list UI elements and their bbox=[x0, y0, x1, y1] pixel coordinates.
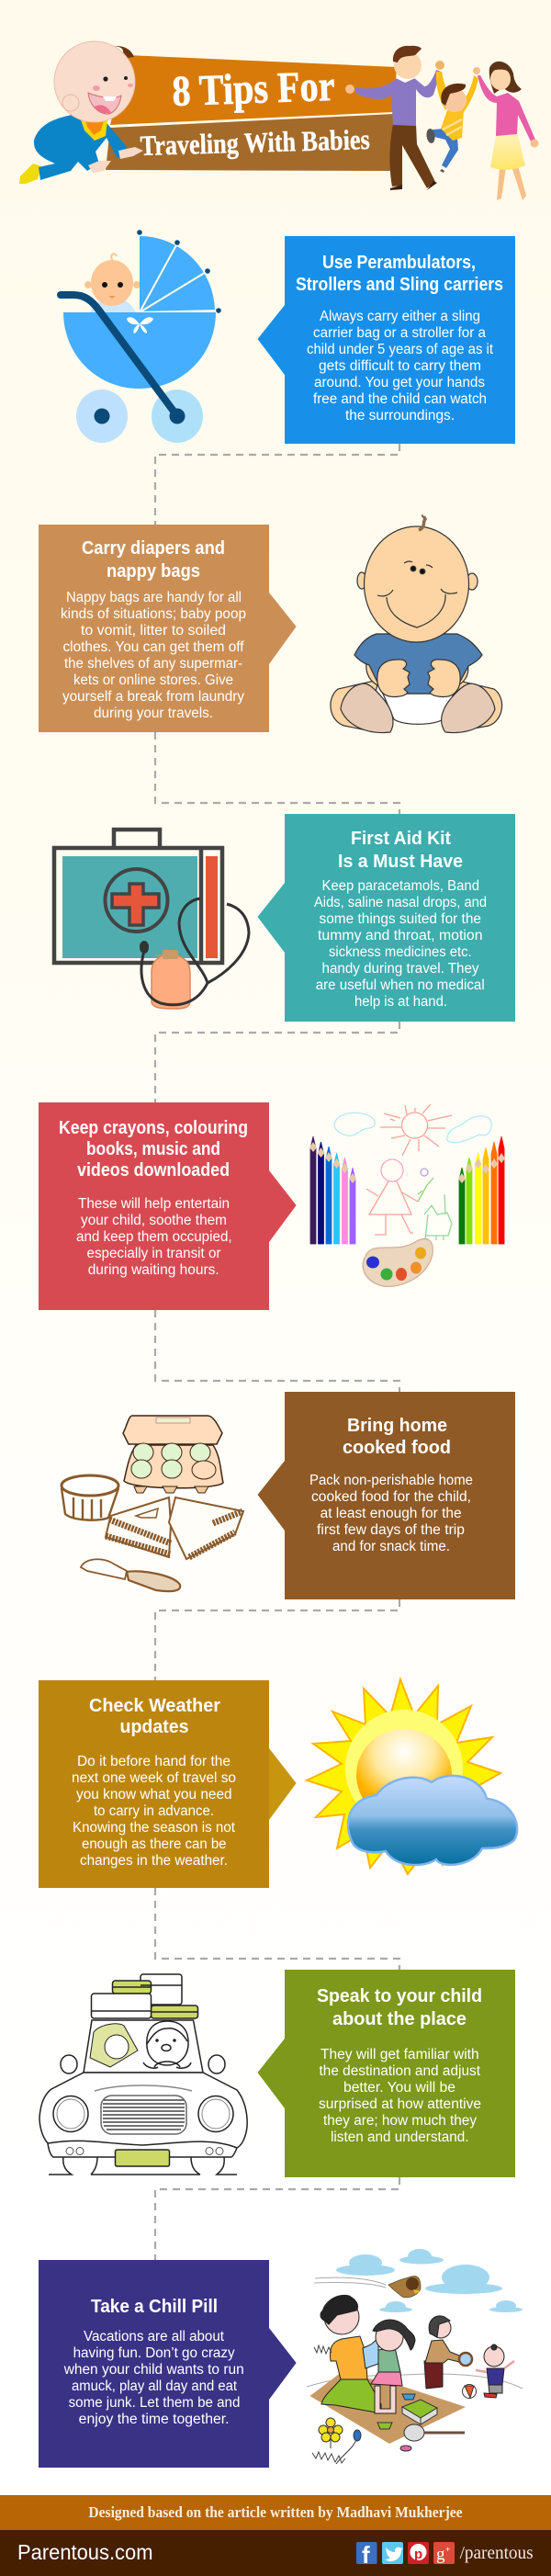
body text: some junk. Let them be and bbox=[69, 2395, 240, 2411]
windscreen bbox=[84, 2020, 203, 2073]
body text: free and the child can watch bbox=[313, 391, 487, 407]
body text: They will get familiar with bbox=[320, 2047, 479, 2062]
body text: yourself a break from laundry bbox=[62, 689, 244, 705]
heading: Strollers and Sling carriers bbox=[296, 275, 503, 295]
body text: the surroundings. bbox=[345, 408, 455, 424]
icon: facebook: f bbox=[362, 2541, 370, 2569]
body text: your child, soothe them bbox=[81, 1213, 227, 1228]
headlights bbox=[53, 2096, 88, 2131]
body text bbox=[319, 2047, 481, 2145]
heading: Check Weather bbox=[89, 1696, 220, 1716]
egg carton bbox=[123, 1416, 223, 1493]
footer credit band bbox=[0, 2495, 551, 2530]
boy bbox=[425, 67, 480, 173]
panel: card 1 bbox=[257, 236, 515, 444]
bird bbox=[388, 2277, 421, 2298]
credit text: Designed based on the article written by Madhavi Mukherjee bbox=[88, 2503, 463, 2521]
heading bbox=[82, 538, 225, 582]
body text: during waiting hours. bbox=[88, 1262, 219, 1278]
icon: eggs, sandwich, bowl and knife bbox=[62, 1416, 243, 1591]
tip 1: perambulators bbox=[61, 230, 515, 444]
heading bbox=[338, 829, 463, 872]
body text: kinds of situations; baby poop bbox=[61, 606, 246, 622]
icon: family picnic bbox=[307, 2249, 523, 2464]
child drawing bbox=[366, 1159, 418, 1235]
pencils bbox=[309, 1136, 505, 1244]
body text: at least enough for the bbox=[320, 1506, 462, 1521]
icon: car with luggage and driver bbox=[39, 1974, 247, 2175]
body text: especially in transit or bbox=[86, 1246, 220, 1261]
heading: Is a Must Have bbox=[338, 852, 463, 872]
panel: card 8 bbox=[39, 2260, 297, 2468]
crayon sun and clouds bbox=[334, 1104, 491, 1240]
grille bbox=[101, 2096, 186, 2134]
icon: facebook bbox=[356, 2541, 377, 2569]
heading: about the place bbox=[332, 2009, 467, 2029]
ground line bbox=[307, 2277, 523, 2389]
body text: Nappy bags are handy for all bbox=[66, 590, 242, 605]
body text: listen and understand. bbox=[331, 2130, 468, 2145]
body text: the shelves of any supermar- bbox=[64, 656, 242, 672]
woman reading bbox=[320, 2295, 381, 2413]
body text: handy during travel. They bbox=[321, 961, 479, 977]
ramekin bowl bbox=[62, 1475, 118, 1520]
heading: Use Perambulators, bbox=[322, 253, 476, 273]
body text: carrier bag or a stroller for a bbox=[313, 325, 486, 341]
body text: and for snack time. bbox=[332, 1539, 450, 1554]
body text: having fun. Don’t go crazy bbox=[73, 2345, 235, 2361]
body text: and keep them occupied, bbox=[76, 1229, 232, 1245]
body text: tummy and throat, motion bbox=[318, 928, 483, 943]
body text bbox=[76, 1196, 232, 1278]
icon: google plus: g bbox=[436, 2545, 445, 2564]
heading: Keep crayons, colouring bbox=[59, 1118, 248, 1138]
body text: surprised at how attentive bbox=[319, 2096, 481, 2112]
panel: card 7 bbox=[257, 1970, 515, 2177]
heading bbox=[317, 1986, 482, 2029]
heading: books, music and bbox=[86, 1139, 220, 1159]
body text: Keep paracetamols, Band bbox=[321, 878, 479, 894]
heading: Bring home bbox=[347, 1416, 447, 1436]
body text: they are; how much they bbox=[323, 2113, 477, 2129]
tip 8: chill pill bbox=[39, 2249, 523, 2468]
body text: around. You get your hands bbox=[314, 375, 485, 390]
panel: card 5 bbox=[257, 1392, 515, 1599]
heading bbox=[296, 253, 503, 295]
body text bbox=[72, 1754, 236, 1869]
man with frame bbox=[424, 2316, 472, 2389]
icon: first aid case with stethoscope bbox=[54, 830, 249, 1009]
body text bbox=[314, 878, 487, 1010]
body text: Pack non-perishable home bbox=[309, 1473, 473, 1488]
tip 4: crayons bbox=[39, 1102, 505, 1310]
tip 5: home cooked food bbox=[62, 1392, 515, 1599]
body text: you know what you need bbox=[76, 1787, 232, 1802]
icon: google plus: + bbox=[445, 2545, 450, 2554]
heading: updates bbox=[119, 1717, 189, 1737]
heading: nappy bags bbox=[107, 561, 200, 582]
body text: gets difficult to carry them bbox=[319, 358, 481, 374]
tip 3: first aid kit bbox=[54, 814, 515, 1022]
body text: next one week of travel so bbox=[72, 1770, 236, 1786]
body text: amuck, play all day and eat bbox=[72, 2378, 238, 2394]
body text: child under 5 years of age as it bbox=[307, 342, 494, 357]
mirrors bbox=[61, 2055, 77, 2073]
subtitle: Traveling With Babies: Traveling With Babies bbox=[140, 123, 370, 162]
tip 2: diapers bbox=[39, 515, 502, 733]
arrow bbox=[269, 1748, 297, 1820]
heading: cooked food bbox=[343, 1438, 451, 1458]
butter knife bbox=[81, 1559, 180, 1591]
icon: google plus bbox=[433, 2542, 455, 2564]
panel: card 2 bbox=[39, 525, 297, 732]
handle: /parentous bbox=[460, 2543, 534, 2563]
picnic mat bbox=[310, 2372, 466, 2444]
body text: better. You will be bbox=[343, 2080, 455, 2096]
body text: clothes. You can get them off bbox=[62, 639, 244, 655]
wheels bbox=[49, 2157, 237, 2175]
luggage bbox=[92, 1974, 198, 2018]
body text: are useful when no medical bbox=[316, 977, 485, 993]
sandwich triangles bbox=[106, 1497, 243, 1559]
body text: These will help entertain bbox=[78, 1196, 230, 1212]
body text: cooked food for the child, bbox=[311, 1489, 471, 1505]
icon: pinterest: p bbox=[414, 2547, 422, 2562]
icon: pinterest bbox=[408, 2542, 429, 2564]
body text bbox=[309, 1473, 473, 1554]
connector dashed lines bbox=[155, 444, 399, 2260]
body text: Aids, saline nasal drops, and bbox=[314, 895, 487, 910]
number plate bbox=[116, 2150, 169, 2166]
paint palette bbox=[363, 1238, 433, 1286]
panel: card 6 bbox=[39, 1680, 297, 1888]
body text: first few days of the trip bbox=[317, 1522, 465, 1538]
body text: Vacations are all about bbox=[84, 2329, 225, 2344]
body text: enough as there can be bbox=[82, 1836, 226, 1852]
body text: enjoy the time together. bbox=[79, 2412, 230, 2427]
icon: twitter bbox=[382, 2542, 403, 2564]
clouds bbox=[336, 2249, 523, 2312]
body text: changes in the weather. bbox=[80, 1853, 228, 1869]
ball, box, cups, racket and flowers bbox=[312, 2345, 476, 2464]
banner: brown ribbon bbox=[106, 114, 394, 171]
panel: card 3 bbox=[257, 814, 515, 1022]
toddler bbox=[476, 2344, 514, 2398]
body text: when your child wants to run bbox=[63, 2362, 244, 2378]
heading: First Aid Kit bbox=[351, 829, 451, 849]
heading bbox=[89, 1696, 220, 1737]
body text: the destination and adjust bbox=[320, 2063, 481, 2079]
body text: during your travels. bbox=[94, 706, 213, 721]
body text: to carry in advance. bbox=[94, 1803, 214, 1819]
body text: kets or online stores. Give bbox=[73, 672, 233, 688]
icon: crawling baby bbox=[19, 41, 143, 184]
header banner bbox=[106, 55, 397, 171]
body text bbox=[63, 2329, 244, 2427]
footer brand bar bbox=[0, 2530, 551, 2576]
icon: family holding hands bbox=[345, 46, 538, 200]
banner: orange ribbon bbox=[110, 55, 397, 125]
body text: help is at hand. bbox=[354, 994, 447, 1010]
body text bbox=[307, 309, 494, 424]
body text: Always carry either a sling bbox=[320, 309, 480, 324]
heading: Speak to your child bbox=[317, 1986, 482, 2006]
panel: card 4 bbox=[39, 1102, 297, 1310]
man bbox=[345, 46, 444, 190]
body text: to vomit, litter to soiled bbox=[81, 623, 226, 638]
icon: sitting baby bbox=[331, 515, 502, 733]
woman bbox=[478, 62, 538, 200]
tip 6: weather bbox=[39, 1679, 517, 1888]
title: 8 Tips For: 8 Tips For bbox=[172, 62, 335, 116]
girl bbox=[363, 2320, 415, 2413]
heading: Carry diapers and bbox=[82, 538, 225, 559]
tip 7: speak to your child bbox=[39, 1970, 515, 2177]
icon: coloured pencils and child drawing bbox=[309, 1104, 505, 1286]
body text: Do it before hand for the bbox=[77, 1754, 231, 1769]
body text bbox=[61, 590, 246, 721]
body text: sickness medicines etc. bbox=[329, 944, 472, 960]
heading: videos downloaded bbox=[77, 1160, 230, 1181]
heading: Take a Chill Pill bbox=[91, 2297, 218, 2317]
driver bbox=[143, 2021, 191, 2068]
body text: some things suited for the bbox=[320, 911, 481, 927]
body text: Knowing the season is not bbox=[73, 1820, 236, 1836]
heading bbox=[59, 1118, 248, 1181]
icon: baby stroller bbox=[61, 230, 221, 443]
car body bbox=[39, 2073, 247, 2157]
heading bbox=[343, 1416, 451, 1458]
brand name: Parentous.com bbox=[17, 2540, 152, 2564]
icon: sun behind cloud bbox=[307, 1679, 517, 1874]
